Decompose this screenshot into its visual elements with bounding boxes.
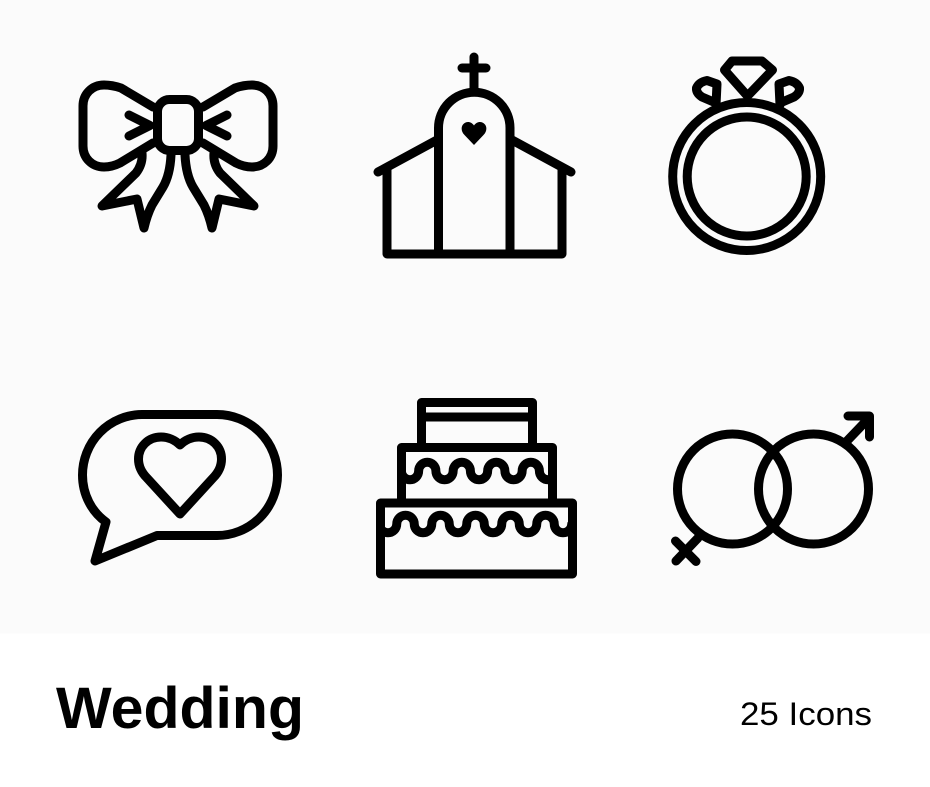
title: Wedding: [56, 676, 304, 741]
icon: speech bubble with heart: [82, 414, 278, 561]
icon: church heart: [462, 122, 486, 145]
icon: interlocked gender symbols: [676, 416, 870, 562]
icon count label: 25 Icons: [740, 696, 872, 732]
icon: diamond ring: [673, 61, 821, 250]
icon: church: [378, 57, 571, 254]
icon: wedding cake: [379, 402, 572, 574]
icon: bow: [83, 85, 273, 228]
